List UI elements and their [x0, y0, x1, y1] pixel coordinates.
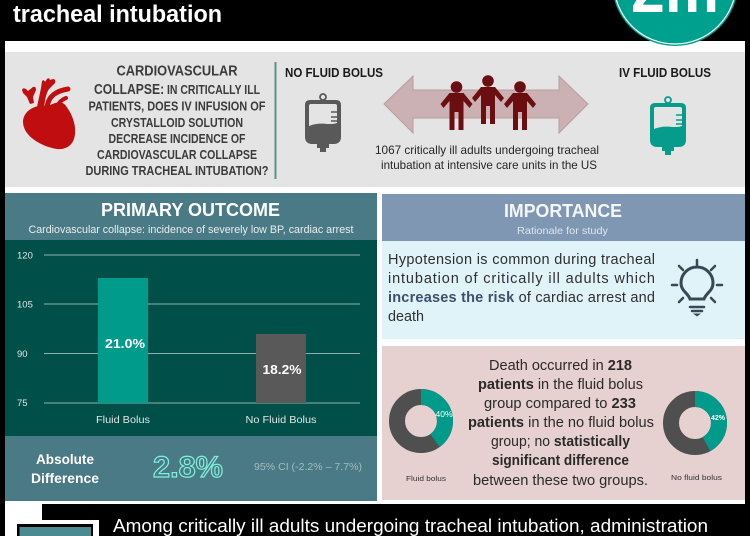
heading: importance: IMPORTANCE — [504, 201, 622, 221]
bar chart: 90 — [17, 349, 28, 360]
label: no fluid bolus: No fluid bolus — [671, 473, 722, 482]
icon: three people — [440, 75, 536, 130]
chart: no fluid bolus donut: 42% — [711, 415, 726, 422]
text: rationale: Hypotension is common during tracheal — [388, 252, 655, 268]
text: research question: CRYSTALLOID SOLUTION — [111, 116, 243, 130]
bar chart: 21.0% — [105, 336, 145, 351]
bar chart: No Fluid Bolus — [246, 414, 316, 426]
text: research question: DURING TRACHEAL INTUBATION? — [86, 164, 268, 178]
text: deaths: significant difference — [492, 453, 629, 469]
text: deaths: patients in the fluid bolus — [478, 377, 643, 393]
bar: fluid bolus — [98, 278, 148, 403]
text: population: intubation at intensive care units in the US — [381, 158, 597, 172]
subheading: outcome definition: Cardiovascular collapse: incidence of severely low BP, cardiac arrest — [28, 224, 354, 236]
text: research question: CARDIOVASCULAR — [116, 64, 238, 80]
text: deaths: between these two groups. — [473, 473, 648, 489]
icon: double arrow — [384, 76, 588, 133]
bar: no fluid bolus — [256, 334, 306, 403]
label: absolute difference — [31, 452, 99, 486]
logo badge — [612, 0, 738, 46]
text: research question: COLLAPSE: IN CRITICALLY ILL — [94, 82, 260, 98]
icon: conclusion box — [17, 524, 93, 536]
text: population — [375, 143, 599, 172]
text: deaths: group compared to 233 — [484, 396, 636, 412]
text: research question — [86, 64, 268, 178]
icon: lightbulb — [672, 260, 722, 316]
subheading: rationale: Rationale for study — [517, 225, 609, 237]
text: rationale: increases the risk of cardiac arrest and — [388, 290, 655, 306]
icon: grey IV bag — [305, 94, 341, 152]
icon: heart — [22, 78, 75, 149]
label: fluid bolus: Fluid bolus — [406, 474, 446, 483]
chart: fluid bolus donut — [397, 397, 453, 445]
label: absolute difference: Difference — [31, 471, 99, 486]
bar chart — [17, 250, 360, 426]
label: IV fluid bolus: IV FLUID BOLUS — [619, 66, 711, 80]
text: confidence interval: 95% CI (-2.2% – 7.7%) — [254, 461, 362, 473]
panel: study question and population — [5, 52, 745, 187]
text: deaths — [468, 358, 654, 489]
heading: primary outcome: PRIMARY OUTCOME — [101, 200, 280, 220]
stat: 2.8%: 2.8% — [153, 451, 223, 484]
text: research question: PATIENTS, DOES IV INFUSION OF — [88, 100, 266, 114]
chart: fluid bolus donut: 40% — [435, 409, 453, 419]
text: deaths: Death occurred in 218 — [489, 358, 632, 374]
bar chart: 18.2% — [262, 362, 302, 377]
footer: conclusion — [5, 503, 750, 536]
label: absolute difference: Absolute — [36, 452, 94, 467]
text: deaths: patients in the no fluid bolus — [468, 415, 654, 431]
panel: primary outcome — [5, 193, 377, 501]
text: conclusion: Among critically ill adults undergoing tracheal intubation, administration — [113, 515, 708, 536]
text: research question: DECREASE INCIDENCE OF — [108, 132, 246, 146]
text: population: 1067 critically ill adults undergoing tracheal — [375, 143, 599, 157]
chart: no fluid bolus donut — [671, 399, 726, 447]
bar chart: 120 — [17, 250, 33, 262]
title: tracheal intubation — [13, 1, 222, 28]
text: deaths: group; no statistically — [491, 434, 630, 450]
bar chart: 105 — [17, 300, 33, 310]
bar chart: 75 — [17, 398, 28, 409]
text: rationale: intubation of critically ill adults which — [388, 271, 655, 287]
panel: importance — [382, 194, 745, 339]
text: research question: CARDIOVASCULAR COLLAPSE — [97, 148, 257, 162]
icon: teal IV bag — [650, 97, 686, 155]
bar chart: Fluid Bolus — [96, 414, 150, 426]
text: rationale — [388, 252, 655, 325]
panel: mortality — [382, 346, 745, 500]
text: rationale: death — [388, 309, 424, 325]
label: no fluid bolus: NO FLUID BOLUS — [285, 66, 383, 80]
